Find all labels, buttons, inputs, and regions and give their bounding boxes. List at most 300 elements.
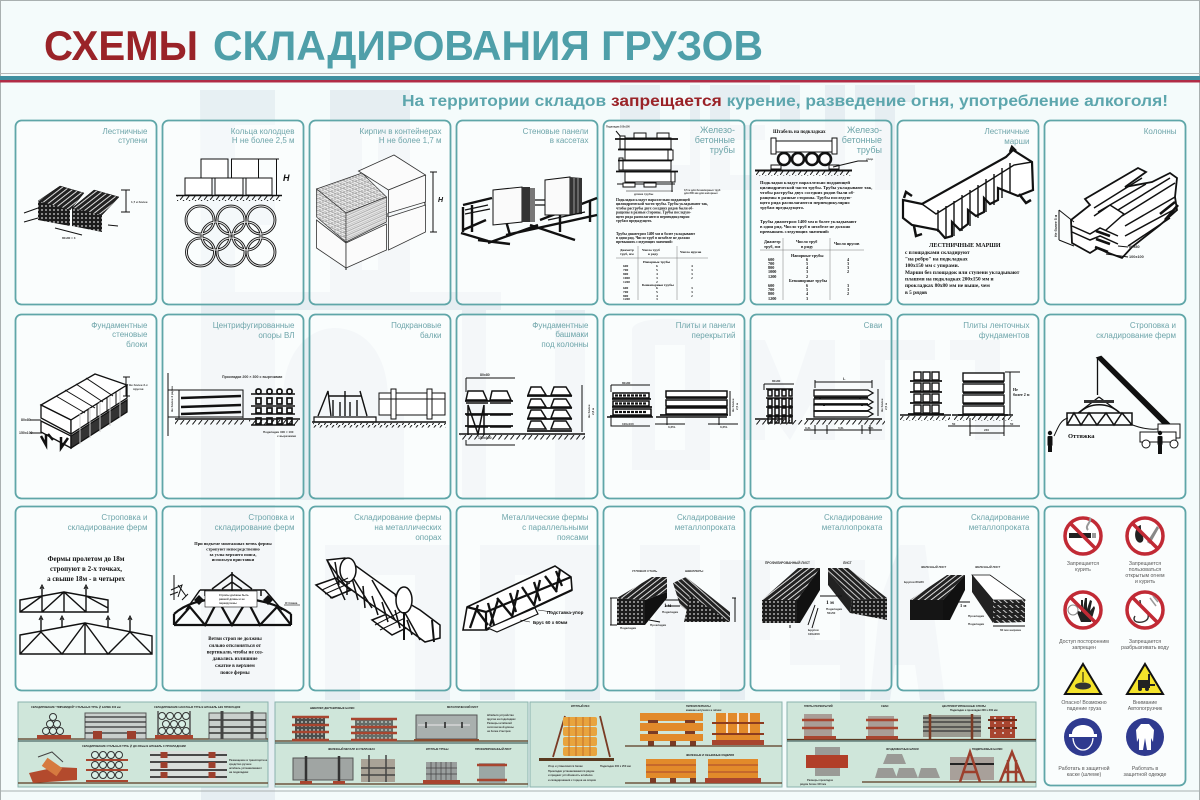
table: Число ярусов [834, 241, 860, 246]
sign: no entry [1065, 592, 1101, 628]
drawing note: Оттяжка [285, 601, 298, 605]
caption: курить [1075, 567, 1091, 573]
drawing: profile sheets: 1 м [826, 600, 834, 606]
drawing: rolled metal stacks: 1 м [664, 604, 672, 609]
strip note [800, 778, 834, 786]
drawing: footings [459, 373, 595, 445]
drawing: slabs: 0,25L [668, 425, 676, 429]
strip drawing [275, 715, 528, 784]
drawing: crane lifting truss: Оттяжка [1068, 433, 1095, 440]
body text: 100х150 мм с упорами. [905, 263, 960, 269]
table: 4 [691, 264, 693, 268]
table: 1000 [623, 276, 630, 280]
table: 6 [656, 264, 658, 268]
table: 3 [691, 272, 693, 276]
sign: protective clothing [1126, 718, 1164, 756]
drawing: profile sheets [762, 561, 887, 636]
strip note: штабель устанавливают [229, 766, 262, 770]
drawing: sheet metal: ЖЕЛЕЗНЫЙ ЛИСТ [974, 565, 1000, 569]
panel title: Сваи [864, 321, 882, 330]
body text: с площадками складируют [905, 250, 970, 256]
drawing: slabs: 80х80 [622, 381, 631, 385]
table: 700 [768, 287, 774, 292]
table: Безнапорные трубы [642, 283, 674, 287]
drawing: slabs: 0,25L [720, 425, 728, 429]
drawing: profile sheets: 100х200 [808, 632, 820, 636]
body text: ращены в разные стороны. Трубы последую- [760, 195, 852, 200]
panel title: Кирпич в контейнерах [360, 127, 442, 136]
truss caption: равной длины и не [219, 597, 245, 601]
panel: fundamentnye bloki [16, 314, 156, 498]
drawing: strip foundation slabs [900, 372, 1030, 436]
drawing labels [533, 610, 584, 625]
panel: metalloprokat 3 [898, 506, 1038, 690]
truss caption: Стропы должны быть [219, 593, 249, 597]
body text: за узлы верхнего пояса, [210, 552, 256, 557]
drawing: rolled metal stacks: Подкладка [662, 610, 678, 614]
table: 4 [656, 294, 658, 298]
body text: прокладках 80х80 мм не выше, чем [905, 283, 990, 289]
table: 4 [806, 291, 809, 296]
strip caption: СВАИ [881, 704, 888, 708]
body text: Ветви строп не должны [208, 637, 262, 642]
table: 6 [806, 283, 808, 288]
caption: Опасно! Возможно [1061, 700, 1107, 706]
strip caption: СКЛАДИРОВАНИЕ НАКАТНЫХ ТРУБ В ШТАБЕЛЬ БЕЗ ПРОКЛАДОК [154, 705, 241, 709]
drawing: sheet metal: ЖЕЛЕЗНЫЙ ЛИСТ [920, 565, 946, 569]
table: Диаметр [620, 248, 634, 252]
panel title: Стеновые панели [523, 127, 588, 136]
table: 3 [691, 286, 693, 290]
panel title: опорах [415, 533, 442, 542]
table: 1200 [623, 297, 630, 301]
panel: kirpich v konteinerah [310, 120, 450, 304]
drawing: pipes on supports: Штабель на подкладках [773, 130, 826, 135]
body text: сильно отклоняться от [209, 644, 262, 649]
panel title: Колонны [1144, 127, 1177, 136]
body text: превышать следующих значений: [616, 240, 673, 244]
strip note: Подкладки 200 х 250 мм [600, 764, 631, 768]
table: 3 [847, 261, 849, 266]
panel: plity lentochnyh fundamentov [898, 314, 1038, 498]
panel title: складирование ферм [68, 523, 148, 532]
panel title: Железо- [847, 125, 882, 135]
body text: используя приставки [212, 557, 255, 562]
panel title: фундаментов [979, 331, 1030, 340]
drawing: pipes top view: 0,5 м для безнапорных труб [684, 188, 721, 192]
strip caption: ЖЕЛЕЗНЫЕ И ОБЪЕМНЫЕ ИЗДЕЛИЯ [686, 753, 734, 757]
drawing: columns stack: 100х100 [1129, 255, 1144, 259]
drawing: stacked stairs: 1,7 и более [131, 200, 148, 204]
caption: Внимание [1133, 700, 1157, 706]
body text: сжатие в верхнем [215, 664, 255, 669]
drawing: blocks: 80х80 [21, 418, 31, 422]
drawing: sheet metal: 60 мм ширина [1000, 628, 1021, 632]
panel title: складирование ферм [215, 523, 294, 532]
drawing: strip foundation slabs: 50 [1010, 422, 1014, 426]
body text: щего ряда располагаются перпендикулярно [616, 215, 690, 219]
body text: поясе фермы [220, 671, 250, 676]
drawing: rings stacked [176, 159, 290, 266]
drawing: supports stacked: Подкладки 300 × 100 [263, 430, 294, 434]
body text: стропуют в 2-х точках, [50, 565, 122, 573]
panel title: под колонны [541, 340, 589, 349]
panel: metalloprokat 1 [604, 506, 744, 690]
panel: stropovka ferm 1 [16, 506, 156, 690]
panel title: Железо- [700, 125, 735, 135]
panel: skladirovanie fermy na oporah [310, 506, 450, 690]
drawing: parallel chord truss [463, 566, 572, 632]
panel: centrifugirovannye opory [162, 314, 304, 498]
drawing: sheet metal: Прокладки [968, 614, 984, 618]
body text: а свыше 18м - в четырех [47, 575, 125, 583]
caption: и курить [1135, 579, 1155, 585]
caption: Работать в [1132, 766, 1158, 772]
table: 1200 [768, 296, 776, 301]
caption: открытым огнем [1125, 573, 1165, 579]
panel title: Кольца колодцев [231, 127, 294, 136]
drawing: small truss [20, 585, 108, 612]
drawing: rolled metal stacks: Подкладки [620, 626, 636, 630]
strip note: на подкладках [229, 771, 249, 774]
panel: stenovye paneli [456, 120, 598, 304]
sign: falling load [1065, 664, 1101, 694]
strip caption: СКЛАДИРОВАНИЕ СТАЛЬНЫХ ТРУБ ∅ ДО 300мм В ШТАБЕЛЬ С ПРОКЛАДКАМИ [82, 744, 186, 748]
strip caption: ЖЕЛЕЗНЫЙ МЕТАЛЛ В СТЕЛЛАЖАХ [328, 747, 375, 751]
table: труб, мм [620, 252, 634, 256]
table: 3 [847, 287, 849, 292]
drawing: piles: Не более [880, 398, 884, 412]
strip note: и складирования с торцов на опорах [548, 779, 597, 782]
table: 600 [768, 283, 774, 288]
strip note: Штабеля устройство [487, 713, 514, 717]
panel title: стеновые [112, 330, 148, 339]
caption: Работать в защитной [1058, 765, 1110, 772]
table: 2 [691, 294, 693, 298]
body text: "на ребро" на подкладках [905, 256, 968, 262]
strip: reinforced concrete [787, 702, 1036, 787]
header rule [0, 73, 1200, 82]
sign: no water spray [1127, 592, 1163, 628]
drawing: footings: 2,8 м [591, 407, 595, 415]
caption: каске (шлеме) [1067, 772, 1102, 778]
table [760, 238, 864, 301]
body text: Трубы диаметром 1400 мм и более укладывают [616, 232, 695, 236]
drawing: crane beams [312, 389, 446, 428]
table: 800 [768, 265, 774, 270]
strip caption: ФУНДАМЕНТНЫЕ БЛОКИ [886, 747, 919, 751]
drawing: columns stack: 80х80 [1129, 245, 1140, 249]
strip caption [31, 705, 241, 748]
body text: При подъеме монтажных ветвь фермы [194, 541, 272, 546]
panel: metallicheskie fermy [456, 506, 598, 690]
panel title: балки [420, 331, 442, 340]
drawing: piles: 0,6L [838, 426, 844, 430]
body text: ЛЕСТНИЧНЫЕ МАРШИ [929, 243, 1001, 249]
strip note [487, 713, 516, 733]
panel: zhelezobetonnye truby 1 [604, 120, 744, 304]
panel title: Складирование [971, 513, 1030, 522]
strip drawing [539, 713, 782, 783]
strip: beams and sheets [275, 702, 528, 787]
panel: lestnichnye marshi [898, 120, 1038, 304]
panel title: H не более 1,7 м [379, 136, 442, 145]
table: Число ярусов [680, 250, 701, 254]
table: Напорные трубы [643, 260, 670, 264]
panel title: Строповка и [248, 513, 294, 522]
table [616, 246, 708, 301]
panel: stropovka ferm 2 [162, 506, 304, 690]
strip note: Упор и утяжеляются балки [548, 764, 583, 768]
caption: разбрызгивать воду [1121, 645, 1169, 651]
table: 700 [768, 261, 774, 266]
table: 4 [806, 265, 809, 270]
drawing: panels in cassette [461, 177, 597, 244]
strip caption: МЕТАЛЛИЧЕСКИЙ ЛИСТ [447, 705, 479, 709]
panel: kolonny [1044, 120, 1186, 304]
table: 2 [847, 269, 849, 274]
table: в ряду [648, 252, 658, 256]
body text: давались излишние [213, 657, 258, 662]
table: 5 [806, 261, 808, 266]
drawing: pipes on supports [755, 130, 873, 176]
strip note: Размеры штабелей [487, 721, 512, 725]
panel title: складирование ферм [1096, 331, 1176, 340]
drawing: crane lifting truss [1048, 357, 1180, 454]
panel title: поясами [557, 533, 588, 542]
caption: пользоваться [1129, 567, 1161, 573]
drawing: footings: 80х80 [480, 373, 490, 377]
drawing: large truss [20, 616, 152, 654]
body text: в один ряд. Число труб в штабеле не должно [616, 236, 690, 240]
watermark [200, 85, 1000, 800]
title: СХЕМЫ [44, 22, 198, 69]
caption: запрещен [1072, 645, 1096, 651]
table: 3 [691, 290, 693, 294]
drawing: pipes on supports: упор [866, 157, 873, 161]
body text: чтобы раструбы двух соседних рядов были об- [760, 190, 855, 195]
body text: превышать следующих значений: [760, 229, 830, 234]
drawing: strip foundation slabs: 240 [984, 428, 989, 432]
drawing: blocks [19, 374, 148, 448]
panel title: Складирование [677, 513, 736, 522]
strip note: Размеры прокладок [807, 778, 834, 782]
strip note: ярусов на подкладках [487, 718, 516, 721]
body text: щего ряда располагаются перпендикулярно [760, 200, 850, 205]
table: 1000 [768, 269, 776, 274]
caption: Доступ посторонним [1059, 639, 1109, 645]
drawing: piles: 80х80 [772, 379, 781, 383]
drawing: footings: 150х100 [478, 436, 492, 440]
table: 3 [656, 276, 658, 280]
panel title: металлопроката [822, 523, 883, 532]
strip note [548, 764, 631, 782]
panel title: трубы [710, 145, 735, 155]
panel title: бетонные [695, 135, 735, 145]
panel: zhelezobetonnye truby 2 [750, 120, 892, 304]
sign: forklift [1127, 664, 1163, 694]
panel title: Центрифугированные [213, 321, 295, 330]
panel: stropovka i skladirovanie ferm crane [1044, 314, 1186, 498]
drawing: pipes top view: Подкладка 100х100 [606, 126, 630, 128]
drawing: rolled metal stacks: УГЛОВАЯ СТАЛЬ [632, 569, 658, 573]
strip: timber [530, 702, 782, 787]
panel title: Фундаментные [91, 321, 148, 330]
table: 5 [806, 287, 808, 292]
sign: helmet [1064, 718, 1102, 756]
table: 600 [623, 264, 628, 268]
panel title: Плиты и панели [676, 321, 736, 330]
strip: pipes storage [18, 702, 268, 787]
body text: цилиндрической части трубы. Трубы укладывают так, [760, 185, 872, 190]
drawing: rolled metal stacks [610, 569, 736, 630]
table: 2 [806, 274, 808, 279]
drawing: stacked stairs [24, 186, 148, 240]
panel title: Складирование [824, 513, 883, 522]
caption: защитной одежде [1124, 771, 1167, 778]
panel title: металлопроката [969, 523, 1030, 532]
caption: падение груза [1067, 706, 1101, 712]
strip caption: СКЛАДИРОВАНИЕ "ПИРАМИДОЙ" СТАЛЬНЫХ ТРУБ ∅ БОЛЕЕ 300 мм [31, 705, 121, 709]
drawing: slabs [607, 381, 739, 429]
table: 800 [623, 272, 628, 276]
strip caption: КРУГЛЫЙ ЛЕС [571, 704, 590, 708]
drawing: strip foundation slabs: более 2 м [1013, 392, 1030, 397]
panel title: Лестничные [984, 127, 1030, 136]
panel title: Металлические фермы [502, 513, 589, 522]
drawing: brick containers [316, 155, 444, 270]
panel title: металлопроката [675, 523, 736, 532]
strip drawing [18, 711, 268, 783]
panel title: ступени [118, 136, 148, 145]
panel: koltsa kolodtsev [162, 120, 304, 304]
panel: lestnichnye stupeni [16, 120, 156, 304]
drawing: pipes top view [606, 126, 721, 196]
table: 800 [768, 291, 774, 296]
strip caption: ШВЕЛЛЕР, ДВУТАВРОВЫЕ БАЛКИ [310, 706, 354, 710]
title: СКЛАДИРОВАНИЯ ГРУЗОВ [213, 22, 763, 69]
drawing: piles: 0,2L [805, 426, 811, 430]
table: 4 [656, 272, 658, 276]
caption: Запрещается [1067, 561, 1099, 567]
panel title: бетонные [842, 135, 882, 145]
strip note: заготовочной длины [487, 725, 515, 729]
table: 800 [623, 294, 628, 298]
panel title: H не более 2,5 м [232, 136, 294, 145]
drawing: blocks: ярусов [133, 387, 144, 391]
table: 4 [847, 257, 850, 262]
drawing: piles [755, 376, 888, 434]
caption: Запрещается [1129, 639, 1161, 645]
panel title: Фундаментные [532, 321, 589, 330]
drawing: strip foundation slabs: 50 [952, 422, 956, 426]
body text: Трубы диаметром 1400 мм и более укладывают [760, 219, 857, 224]
drawing: pipes top view: для 800 мм для напорных [684, 191, 718, 195]
caption: Запрещается [1129, 561, 1161, 567]
drawing labels: Подставка-упор [547, 610, 584, 615]
table: 5 [656, 268, 658, 272]
body text: в один ряд. Число труб в штабеле не должно [760, 224, 851, 229]
drawing: supports stacked: Прокладки 200 × 300 с вырезками [222, 375, 282, 379]
drawing: sheet metal: Подкладки [968, 622, 984, 626]
panel title: блоки [126, 340, 148, 349]
body text: чтобы раструбы двух соседних рядов были об- [616, 206, 694, 210]
table: 3 [847, 265, 849, 270]
strip note: не более 2 метров [487, 729, 511, 733]
table: 600 [768, 257, 774, 262]
strip note: Прокладки устанавливаются рядом [548, 769, 594, 773]
strip drawing [787, 714, 1036, 782]
strip caption: ПОДКРАНОВЫЕ БАЛКИ [972, 747, 1002, 751]
panel title: перекрытий [692, 331, 736, 340]
table: 2 [691, 276, 693, 280]
panel: plity i paneli perekrytiy [604, 314, 744, 498]
drawing: profile sheets: ПРОФИЛИРОВАННЫЙ ЛИСТ [765, 561, 810, 565]
strip caption [310, 705, 512, 751]
drawing: supports stacked: с вырезками [277, 434, 296, 438]
table: 1200 [623, 280, 630, 284]
strip caption: каменно-штучного и лёгких [686, 708, 722, 712]
strip caption [804, 704, 1002, 751]
truss caption: перекручены [219, 602, 237, 605]
table: 6 [656, 286, 658, 290]
table: в ряду [801, 244, 814, 249]
drawing: truss on slings [170, 572, 300, 625]
table: Число труб [796, 239, 817, 244]
strip caption: КРУГЛЫЕ ТРУБЫ [426, 747, 449, 751]
panel title: на металлических [374, 523, 442, 532]
body text: Фермы пролетом до 18м [47, 555, 125, 563]
strip caption: ПРОФИЛИРОВАННЫЙ ЛИСТ [475, 747, 512, 751]
drawing: piles: 0,2L [868, 426, 874, 430]
drawing: stacked stairs: 80х80 × 3 [62, 236, 76, 240]
drawing: supports stacked: Не более 4 рядов [170, 386, 174, 412]
table: 3 [847, 283, 849, 288]
drawing: staircase [903, 147, 1033, 238]
drawing: sheet metal: 1 м [960, 603, 966, 608]
table: 2 [847, 291, 849, 296]
table: 6 [806, 257, 808, 262]
panel title: в кассетах [550, 136, 588, 145]
body text: стропуют непосредственно [206, 546, 261, 552]
body text: Подкладки кладут параллельно поддающей [760, 180, 850, 185]
body text: вертикали, чтобы не соз- [207, 650, 264, 656]
strip caption: ПИЛОМАТЕРИАЛЫ [686, 704, 711, 708]
strip note [229, 758, 268, 774]
drawing: truss on metal supports [316, 558, 440, 642]
panel: podkranovye balki [310, 314, 450, 498]
drawing: pipes top view: длина трубы [634, 192, 654, 196]
table: 3 [806, 296, 808, 301]
strip caption: ПЛИТЫ ПЕРЕКРЫТИЙ [804, 704, 833, 708]
drawing: piles: 2,5 м [884, 402, 888, 410]
drawing: profile sheets: Подкладки [826, 607, 842, 611]
drawing: slabs: 100х100 [622, 422, 634, 426]
drawing: profile sheets: Бруски [808, 628, 819, 632]
drawing: columns stack: Не более 5 м [1054, 214, 1058, 237]
body text: цилиндрической части трубы. Трубы укладывают так, [616, 202, 708, 206]
strip caption [571, 704, 734, 757]
panel: metalloprokat 2 [750, 506, 892, 690]
drawing labels: Брус 60 х 60мм [533, 620, 568, 625]
drawing: sheet metal [904, 565, 1025, 632]
table: 700 [623, 268, 628, 272]
panel title: Плиты ленточных [963, 321, 1030, 330]
strip note: и придают устойчивость штабелю [548, 773, 593, 777]
body text: Марши без площадок или ступени укладывают [905, 269, 1020, 276]
table: 600 [623, 286, 628, 290]
body text: Подкладки кладут параллельно поддающей [616, 198, 691, 202]
